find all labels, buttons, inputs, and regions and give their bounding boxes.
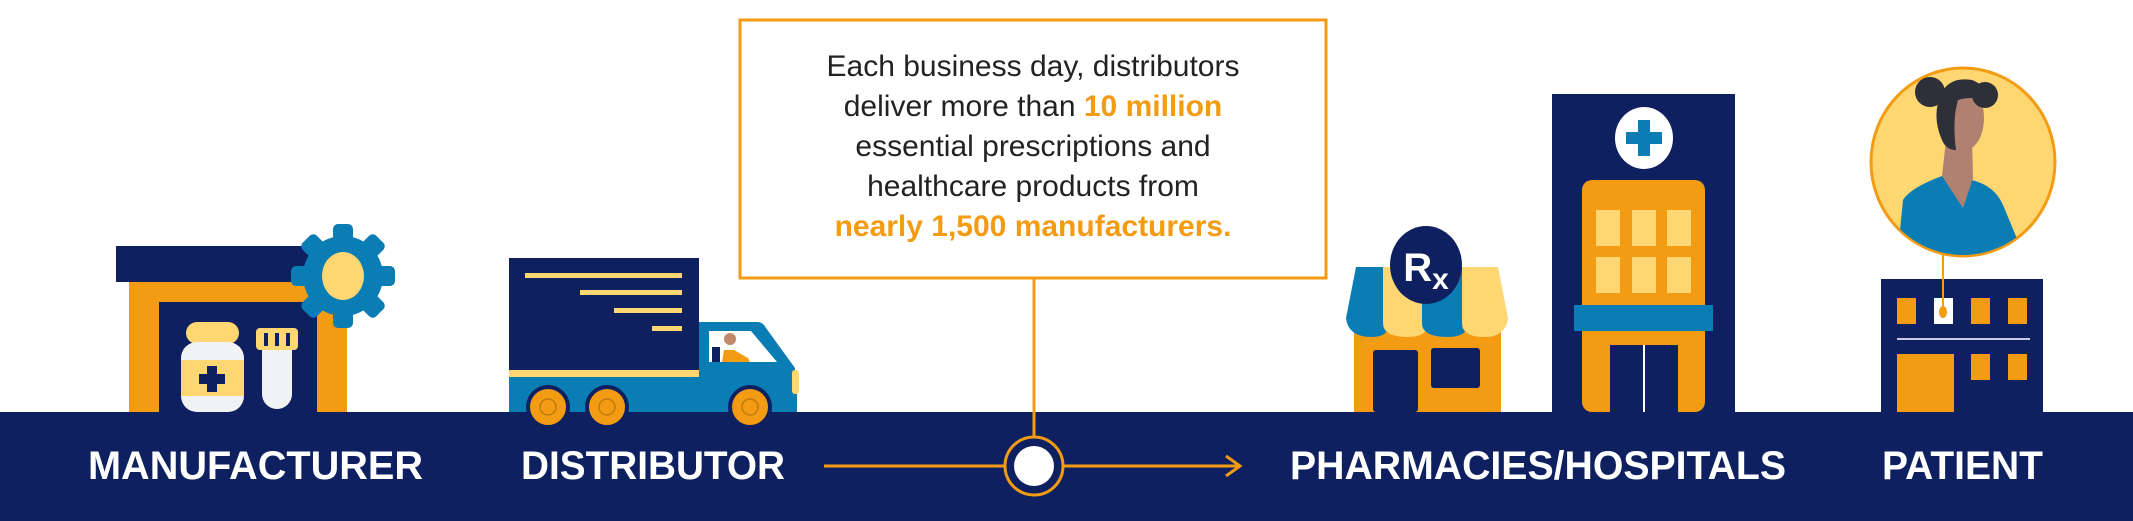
callout box: nearly 1,500 manufacturers. xyxy=(835,210,1231,243)
icon: patient home building xyxy=(1881,252,2043,412)
icon: hospital xyxy=(1552,94,1735,412)
icon: pharmacy: R xyxy=(1403,246,1432,290)
callout box xyxy=(740,20,1326,278)
icon: distributor truck xyxy=(509,258,799,427)
callout box: essential prescriptions and xyxy=(855,130,1211,163)
callout box: deliver more than 10 million xyxy=(844,90,1222,123)
icon: pharmacy xyxy=(1346,226,1508,412)
icon: manufacturer factory xyxy=(116,224,395,412)
arrow xyxy=(824,437,1240,495)
icon: pharmacy: x xyxy=(1432,263,1449,296)
label: pharmacies/hospitals: PHARMACIES/HOSPITALS xyxy=(1290,444,1786,488)
connector line xyxy=(1032,278,1036,440)
label: distributor: DISTRIBUTOR xyxy=(521,444,785,488)
label: patient: PATIENT xyxy=(1882,444,2043,488)
bottom band xyxy=(0,412,2133,521)
callout box: Each business day, distributors xyxy=(827,50,1239,83)
callout box: healthcare products from xyxy=(867,170,1199,203)
label: manufacturer: MANUFACTURER xyxy=(88,444,423,488)
icon: patient portrait xyxy=(1871,68,2055,270)
